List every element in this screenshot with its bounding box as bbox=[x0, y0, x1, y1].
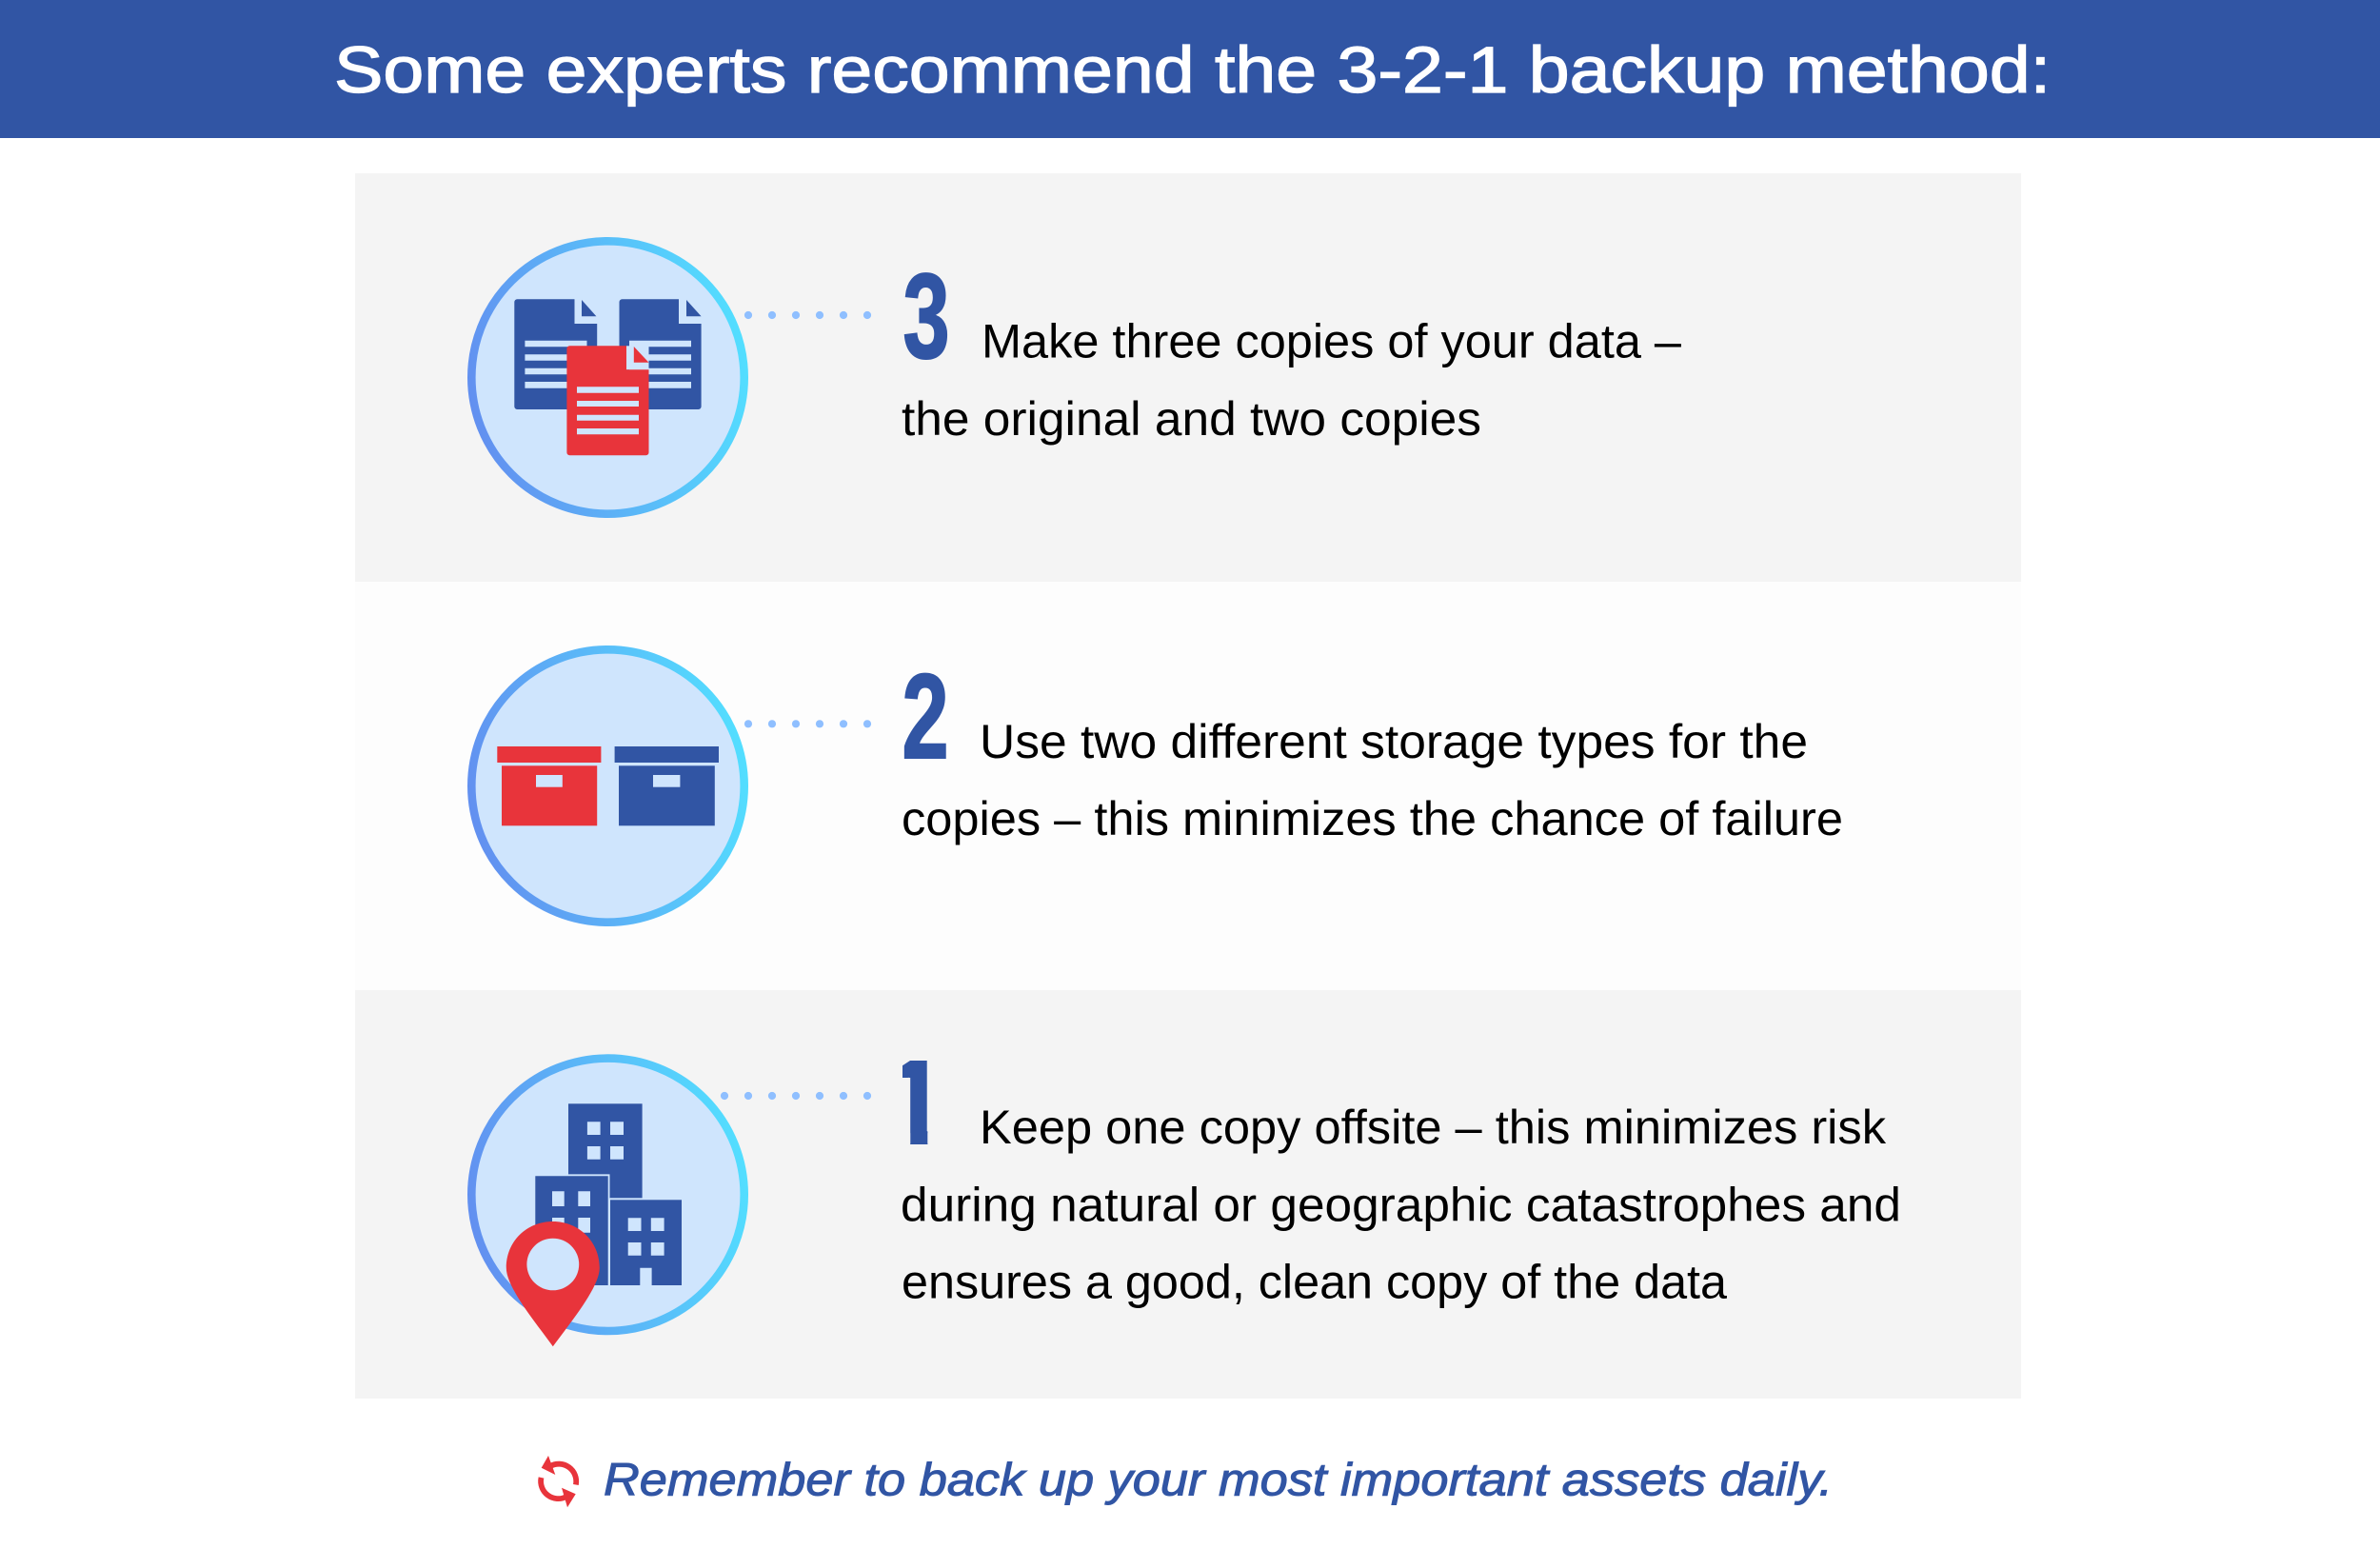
text: two storage types: Use two different storage types for the bbox=[980, 715, 1808, 768]
panel: two storage types bbox=[355, 582, 2021, 990]
icon: three documents bbox=[471, 241, 744, 514]
header banner bbox=[0, 0, 2380, 138]
text: one offsite copy bbox=[901, 1101, 1901, 1309]
dotted connector bbox=[744, 311, 871, 319]
footer reminder bbox=[541, 1456, 1833, 1507]
text: one offsite copy: ensures a good, clean copy of the data bbox=[902, 1256, 1727, 1309]
text: three copies bbox=[902, 314, 1681, 446]
text: two storage types bbox=[902, 715, 1843, 845]
text: two storage types: copies – this minimizes the chance of failure bbox=[902, 792, 1843, 845]
number 3: 3 bbox=[902, 250, 950, 384]
text: one offsite copy: during natural or geographic catastrophes and bbox=[901, 1179, 1901, 1232]
panel: three copies bbox=[355, 173, 2021, 582]
text: three copies: Make three copies of your data – bbox=[982, 314, 1681, 367]
reminder text: Remember to back up your most important assets daily. bbox=[604, 1456, 1833, 1506]
number 1: 1 bbox=[882, 1036, 948, 1170]
number 2: 2 bbox=[902, 651, 949, 784]
panel: one offsite copy bbox=[355, 990, 2021, 1399]
text: three copies: the original and two copies bbox=[902, 392, 1481, 446]
icon: storage boxes bbox=[471, 649, 744, 923]
icon: buildings with location pin bbox=[471, 1059, 744, 1346]
icon: refresh arrows bbox=[541, 1456, 576, 1507]
text: one offsite copy: Keep one copy offsite – this minimizes risk bbox=[980, 1101, 1887, 1154]
title: Some experts recommend the 3-2-1 backup method: bbox=[334, 33, 2051, 107]
dotted connector bbox=[744, 720, 871, 727]
dotted connector bbox=[721, 1092, 871, 1100]
